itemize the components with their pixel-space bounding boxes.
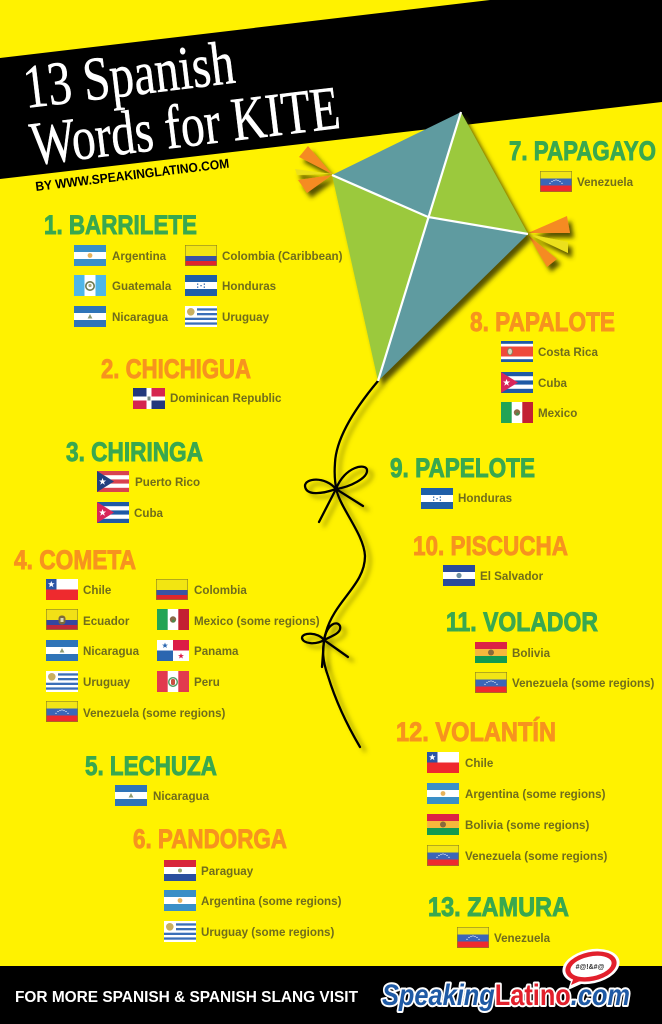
row panama bbox=[157, 640, 239, 661]
row cuba bbox=[501, 372, 568, 393]
row uruguay: Uruguay bbox=[83, 676, 131, 689]
heading 10: 10. PISCUCHA bbox=[413, 531, 568, 561]
row colombia bbox=[156, 579, 247, 600]
row venezuela: Venezuela (some regions) bbox=[465, 850, 608, 863]
kite string and bows bbox=[302, 381, 378, 747]
row honduras: Honduras bbox=[222, 280, 276, 293]
row uruguay bbox=[185, 306, 270, 327]
row argentina bbox=[427, 783, 606, 804]
row honduras bbox=[421, 488, 512, 509]
row colombia: Colombia (Caribbean) bbox=[222, 250, 343, 263]
row venezuela bbox=[475, 672, 655, 693]
row nicaragua bbox=[46, 640, 140, 661]
row guatemala bbox=[74, 275, 172, 296]
speech bubble bbox=[559, 944, 623, 990]
footer bar bbox=[0, 966, 662, 1024]
row venezuela: Venezuela (some regions) bbox=[512, 677, 655, 690]
row venezuela bbox=[540, 171, 634, 192]
row uruguay bbox=[164, 921, 334, 942]
row nicaragua: Nicaragua bbox=[83, 645, 140, 658]
row panama: Panama bbox=[194, 645, 239, 658]
title heading: 13 Spanish bbox=[20, 29, 238, 122]
row colombia: Colombia bbox=[194, 584, 247, 597]
row dominican republic bbox=[133, 388, 282, 409]
row uruguay: Uruguay (some regions) bbox=[201, 926, 334, 939]
row mexico: Mexico (some regions) bbox=[194, 615, 320, 628]
heading 8: 8. PAPALOTE bbox=[470, 307, 615, 337]
row colombia bbox=[185, 245, 343, 266]
speech bubble: #@!&#@ bbox=[576, 964, 605, 971]
row bolivia: Bolivia (some regions) bbox=[465, 819, 589, 832]
row el salvador bbox=[443, 565, 544, 586]
kite right tail bbox=[528, 216, 570, 267]
row venezuela: Venezuela (some regions) bbox=[83, 707, 226, 720]
section 12 volantin bbox=[396, 716, 608, 866]
logo wordmark: SpeakingLatino.com bbox=[382, 979, 630, 1012]
kite left tail bbox=[295, 146, 332, 193]
heading 9: 9. PAPELOTE bbox=[390, 453, 535, 483]
row nicaragua bbox=[74, 306, 169, 327]
section 1 barrilete bbox=[44, 210, 343, 327]
section 5 lechuza bbox=[85, 751, 217, 806]
row guatemala: Guatemala bbox=[112, 280, 172, 293]
row chile: Chile bbox=[83, 584, 112, 597]
row cuba: Cuba bbox=[134, 507, 164, 520]
section 10 piscucha bbox=[413, 531, 568, 586]
row honduras bbox=[185, 275, 276, 296]
row chile bbox=[46, 579, 112, 600]
logo bbox=[382, 944, 630, 1012]
heading 5: 5. LECHUZA bbox=[85, 751, 217, 781]
row el salvador: El Salvador bbox=[480, 570, 544, 583]
byline: BY WWW.SPEAKINGLATINO.COM bbox=[35, 156, 230, 194]
row argentina: Argentina (some regions) bbox=[201, 895, 342, 908]
row costa rica: Costa Rica bbox=[538, 346, 598, 359]
row ecuador bbox=[46, 609, 130, 630]
row costa rica bbox=[501, 341, 598, 362]
row ecuador: Ecuador bbox=[83, 615, 130, 628]
heading 4: 4. COMETA bbox=[14, 545, 136, 575]
row cuba: Cuba bbox=[538, 377, 568, 390]
section 8 papalote bbox=[470, 307, 615, 423]
row venezuela: Venezuela bbox=[494, 932, 551, 945]
row nicaragua: Nicaragua bbox=[153, 790, 210, 803]
row puerto rico: Puerto Rico bbox=[135, 476, 200, 489]
row uruguay: Uruguay bbox=[222, 311, 270, 324]
section 7 papagayo bbox=[509, 136, 656, 192]
row venezuela: Venezuela bbox=[577, 176, 634, 189]
heading 2: 2. CHICHIGUA bbox=[101, 354, 251, 384]
section 6 pandorga bbox=[133, 824, 342, 942]
section 2 chichigua bbox=[101, 354, 282, 409]
section 11 volador bbox=[446, 607, 655, 693]
row dominican republic: Dominican Republic bbox=[170, 392, 282, 405]
row argentina bbox=[74, 245, 167, 266]
row chile bbox=[427, 752, 494, 773]
footer text: FOR MORE SPANISH & SPANISH SLANG VISIT bbox=[15, 989, 358, 1006]
row argentina bbox=[164, 890, 342, 911]
row chile: Chile bbox=[465, 757, 494, 770]
title heading: Words for KITE bbox=[27, 74, 343, 179]
heading 6: 6. PANDORGA bbox=[133, 824, 287, 854]
row uruguay bbox=[46, 671, 131, 692]
kite body bbox=[332, 112, 528, 381]
section 13 zamura bbox=[428, 892, 569, 948]
kite bbox=[295, 112, 570, 381]
row bolivia bbox=[475, 642, 551, 663]
row venezuela bbox=[457, 927, 551, 948]
row argentina: Argentina (some regions) bbox=[465, 788, 606, 801]
kite spars bbox=[332, 112, 528, 381]
row mexico bbox=[501, 402, 577, 423]
row venezuela bbox=[46, 701, 226, 722]
row mexico bbox=[157, 609, 320, 630]
row bolivia: Bolivia bbox=[512, 647, 551, 660]
section 4 cometa bbox=[14, 545, 320, 722]
heading 3: 3. CHIRINGA bbox=[66, 437, 203, 467]
heading 1: 1. BARRILETE bbox=[44, 210, 197, 240]
row paraguay: Paraguay bbox=[201, 865, 254, 878]
section 9 papelote bbox=[390, 453, 535, 509]
section 3 chiringa bbox=[66, 437, 203, 523]
row honduras: Honduras bbox=[458, 492, 512, 505]
row mexico: Mexico bbox=[538, 407, 577, 420]
row argentina: Argentina bbox=[112, 250, 167, 263]
row bolivia bbox=[427, 814, 589, 835]
row peru: Peru bbox=[194, 676, 220, 689]
heading 11: 11. VOLADOR bbox=[446, 607, 598, 637]
title banner bbox=[0, 0, 662, 179]
row nicaragua: Nicaragua bbox=[112, 311, 169, 324]
row paraguay bbox=[164, 860, 254, 881]
heading 13: 13. ZAMURA bbox=[428, 892, 569, 922]
row peru bbox=[157, 671, 220, 692]
heading 12: 12. VOLANTÍN bbox=[396, 716, 556, 747]
title heading bbox=[20, 29, 343, 179]
row venezuela bbox=[427, 845, 608, 866]
